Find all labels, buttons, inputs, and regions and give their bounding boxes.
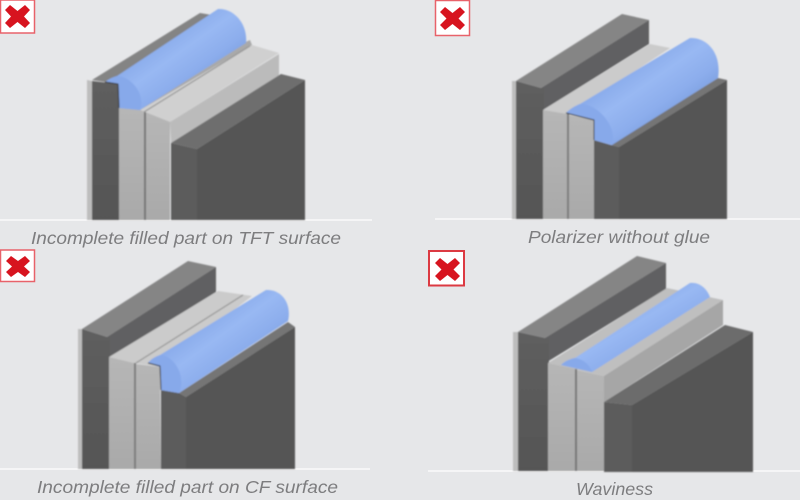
diagram: waviness cross-section <box>513 256 753 472</box>
icon: red cross <box>0 250 34 282</box>
glue bead <box>148 290 289 393</box>
diagram: TFT surface cross-section <box>87 9 305 220</box>
panel: waviness <box>428 251 800 499</box>
divider line <box>0 219 372 221</box>
diagram: CF surface cross-section <box>78 261 295 469</box>
icon: red cross <box>429 251 464 286</box>
caption: Polarizer without glue <box>528 227 710 247</box>
panel: incomplete filled part on CF surface <box>0 250 370 497</box>
caption: Waviness <box>576 479 653 499</box>
glue bead <box>566 38 719 145</box>
panel: polarizer without glue <box>435 0 800 247</box>
caption: Incomplete filled part on CF surface <box>37 477 338 497</box>
panel: incomplete filled part on TFT surface <box>0 0 372 248</box>
divider line <box>0 468 370 470</box>
glue bead <box>561 283 710 372</box>
glue bead <box>105 9 246 110</box>
diagram: polarizer cross-section <box>512 14 727 219</box>
icon: red cross <box>0 0 34 33</box>
divider line <box>428 470 800 472</box>
icon: red cross <box>436 0 470 36</box>
caption: Incomplete filled part on TFT surface <box>31 228 341 248</box>
divider line <box>435 218 800 220</box>
